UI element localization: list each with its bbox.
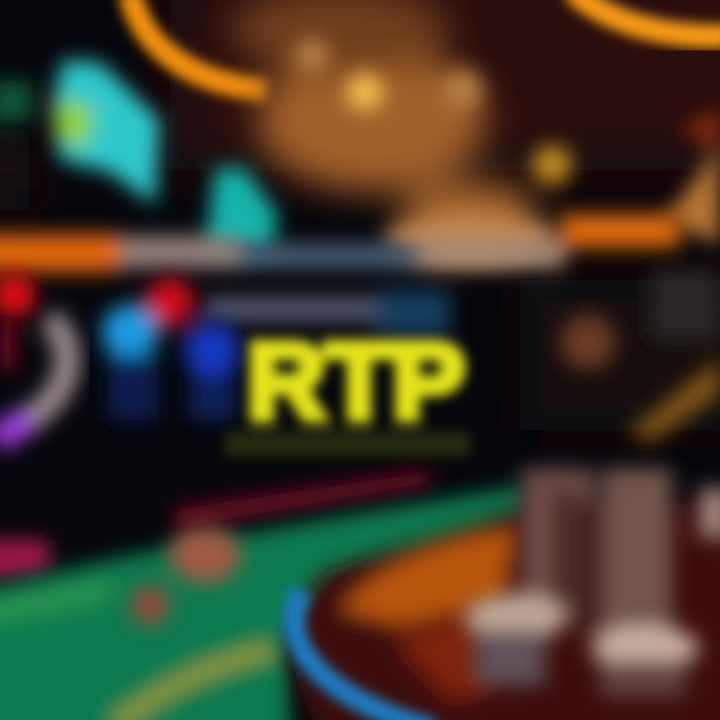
green table [0,486,525,720]
warm ceiling background [0,0,720,430]
stacks of chips [465,468,720,696]
neon band and sign heading [0,214,680,335]
left ring [0,318,68,440]
table edge red strip [0,470,430,580]
chandelier [230,0,572,262]
orange ring top right [572,0,720,36]
RTP text: RTP [247,320,465,441]
dice [130,527,241,625]
cyan neon shapes [0,60,278,252]
roulette wheel [292,500,720,720]
coloured lights [0,273,240,420]
orange ring top left [130,0,268,90]
gold decoration right [560,108,720,442]
